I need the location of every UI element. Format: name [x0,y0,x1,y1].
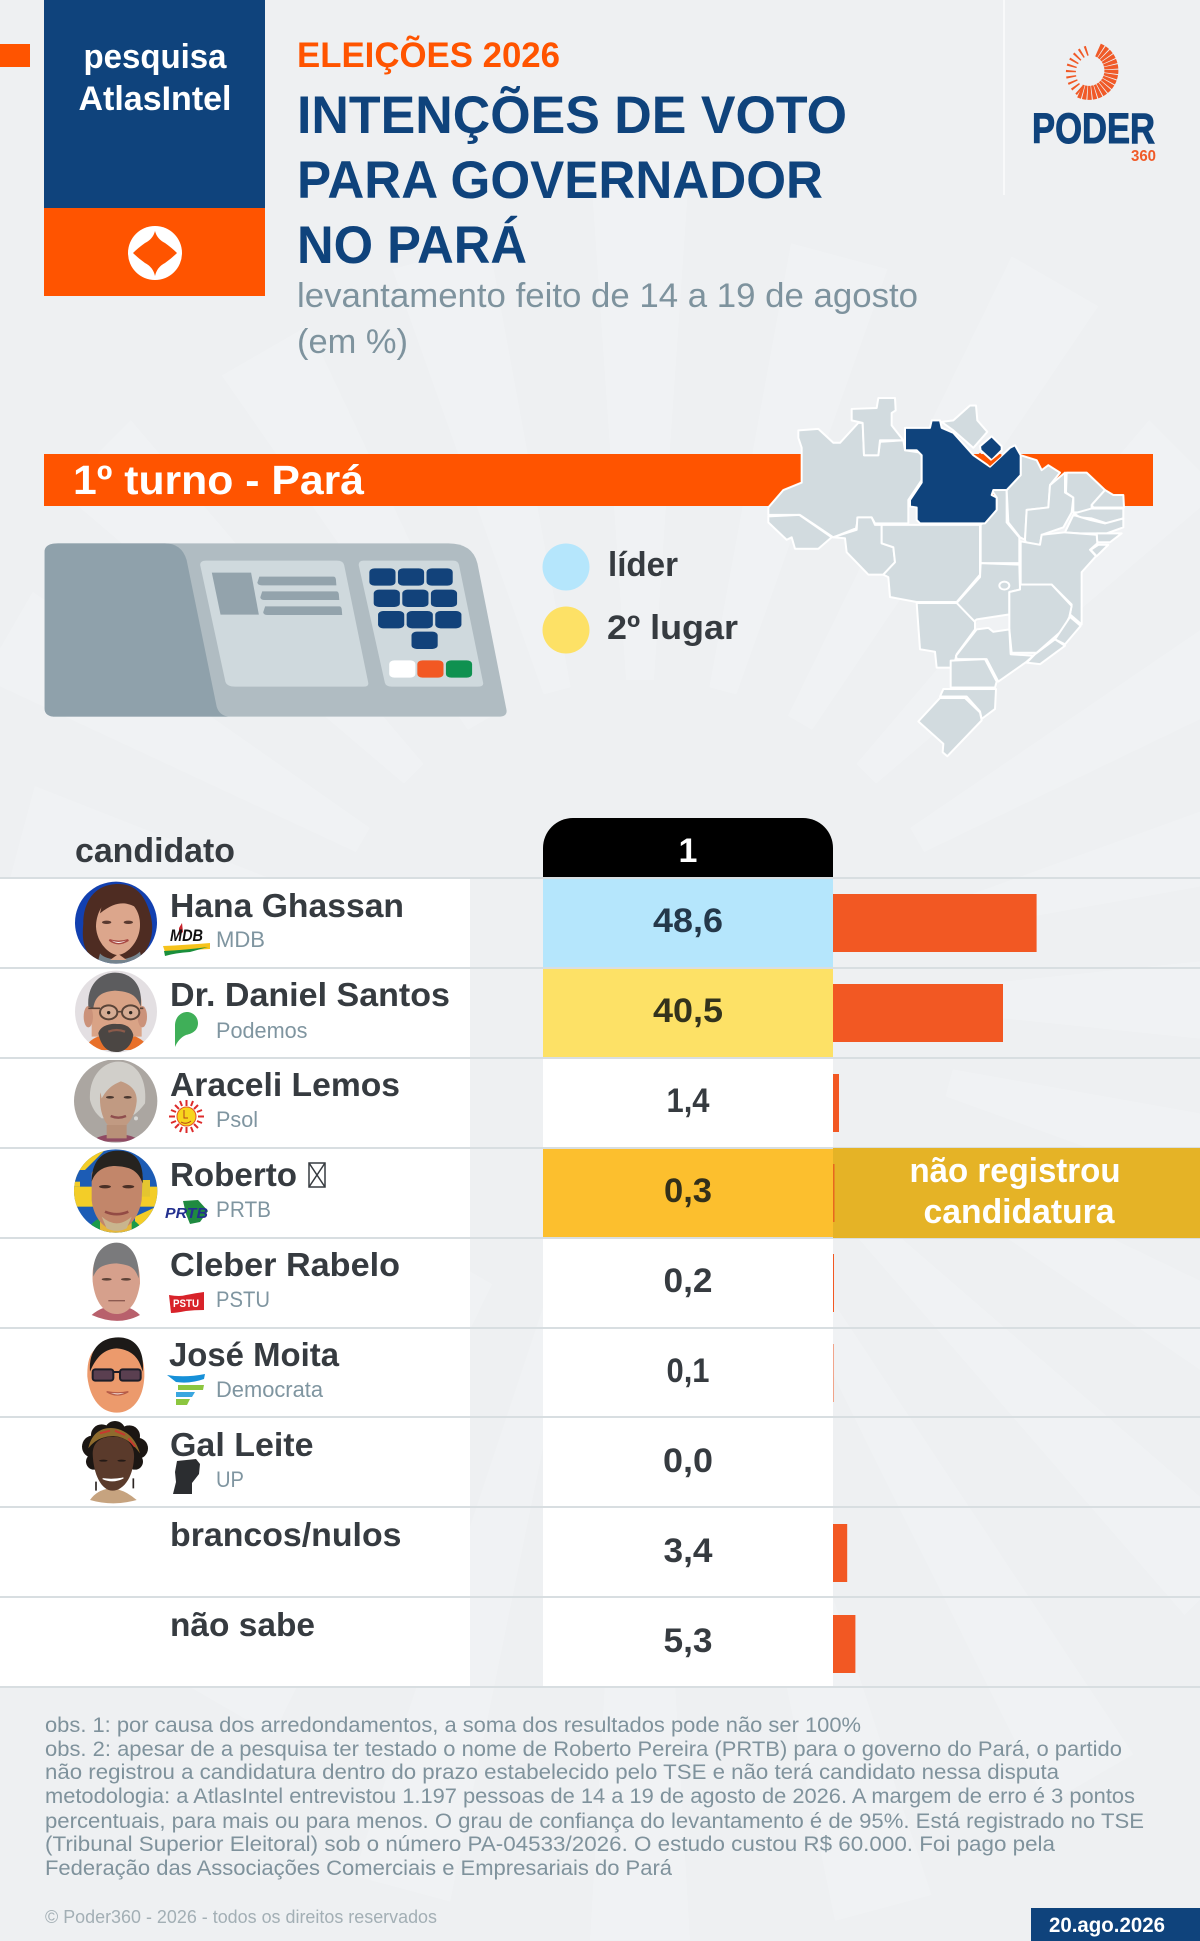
photo: Araceli Lemos [73,1060,160,1143]
row: Araceli Lemos: Psol [216,1107,258,1132]
title: PARA GOVERNADOR [297,151,823,210]
copyright: © Poder360 - 2026 - todos os direitos reservados [45,1907,437,1927]
values: 3,4 [664,1532,713,1570]
date badge: 20.ago.2026 [1049,1914,1165,1937]
row: Araceli Lemos [73,1060,400,1143]
row: Hana Ghassan [73,880,404,967]
banner: 1º turno: 1º turno - Pará [73,457,364,503]
values: 0,2 [664,1262,712,1300]
values: 48,6 [653,902,723,940]
values: 1,4 [666,1082,710,1120]
values: 0,1 [666,1352,710,1390]
notes: metodologia: a AtlasIntel entrevistou 1.197 pessoas de 14 a 19 de agosto de 2026. A margem de erro é 3 pontos [45,1785,1135,1808]
row: Dr. Daniel Santos: Dr. Daniel Santos [170,976,450,1013]
icon: Podemos logo [175,1012,198,1047]
subtitle [297,277,918,361]
badge label [78,38,232,118]
icon: sun [1071,50,1111,93]
callout: não registrou candidatura [833,1148,1200,1238]
logo: Poder360: PODER [1032,105,1155,153]
row: Hana Ghassan: MDB [216,927,265,952]
column heading: 1 [543,818,833,878]
photo: Dr. Daniel Santos [73,970,160,1053]
subtitle: (em %) [297,323,408,361]
map: Brazil with Pará highlighted [768,398,1124,756]
legend [542,544,738,654]
callout: não registrou candidatura: candidatura [924,1193,1116,1231]
row: Gal Leite: UP [216,1467,244,1492]
date badge [1031,1908,1200,1941]
values: 0,3 [664,1172,712,1210]
row: não sabe: não sabe [170,1606,315,1643]
values: 40,5 [653,992,723,1030]
marker: orange tab [0,44,30,67]
row: Dr. Daniel Santos: Podemos [216,1018,308,1043]
icon: PSTU flag [169,1292,204,1313]
notes: percentuais, para mais ou para menos. O grau de confiança do levantamento é de 95%. Está registrado no TSE [45,1810,1144,1833]
values: 5,3 [664,1622,712,1660]
row: Gal Leite: Gal Leite [170,1426,314,1463]
icon: missing glyph box [309,1163,325,1187]
row: Gal Leite [82,1421,313,1503]
notes [45,1714,1144,1880]
row: brancos/nulos: brancos/nulos [170,1516,402,1553]
notes: obs. 1: por causa dos arredondamentos, a soma dos resultados pode não ser 100% [45,1714,861,1737]
photo: Gal Leite [82,1421,148,1503]
notes: obs. 2: apesar de a pesquisa ter testado o nome de Roberto Pereira (PRTB) para o governo do Pará, o partido [45,1738,1122,1761]
icon: MDB logo: MDB [170,926,203,945]
photo: Hana Ghassan [73,880,160,967]
title: NO PARÁ [297,215,527,275]
panel: pesquisa AtlasIntel badge [44,0,265,296]
notes: (Tribunal Superior Eleitoral) sob o número PA-04533/2026. O estudo custou R$ 60.000. Foi pago pela [45,1833,1055,1856]
icon: Democrata logo [167,1374,205,1405]
legend: 2º lugar [542,606,738,654]
callout: não registrou candidatura: não registrou [910,1152,1120,1190]
row: Cleber Rabelo: Cleber Rabelo [170,1246,400,1283]
bar chart: percentages [833,894,1037,1673]
banner: 1º turno [44,454,1153,506]
icon: UP raised fist [173,1459,200,1494]
icon: PRTB logo: PRTB [165,1205,208,1222]
title [297,85,847,275]
logo: Poder360 [1032,50,1156,165]
badge label: AtlasIntel [78,80,232,118]
row: Roberto [73,1148,325,1235]
row: Cleber Rabelo [92,1243,400,1321]
values: 0,0 [663,1442,713,1480]
values [653,902,723,1660]
subtitle: levantamento feito de 14 a 19 de agosto [297,277,918,315]
badge label: pesquisa [84,38,228,76]
legend: 2º lugar: 2º lugar [607,609,738,647]
photo: José Moita [87,1337,144,1413]
row: José Moita: José Moita [169,1336,340,1373]
row: Dr. Daniel Santos [73,970,450,1053]
column heading: 1: 1 [679,832,697,870]
column heading: candidato: candidato [75,832,235,870]
photo: Roberto [73,1148,160,1235]
icon: PSTU flag: PSTU [173,1298,199,1310]
title: INTENÇÕES DE VOTO [297,85,847,145]
row: Roberto: PRTB [216,1197,271,1222]
icon: MDB logo [163,923,210,956]
notes: não registrou a candidatura dentro do prazo estabelecido pelo TSE e não terá candidato nessa disputa [45,1761,1059,1784]
panel: results table [0,877,1200,1688]
row: Roberto: Roberto [170,1156,297,1193]
legend: líder: líder [608,546,678,584]
logo: Poder360: 360 [1131,148,1156,165]
icon: PRTB logo [165,1200,208,1224]
heading: eleições 2026: ELEIÇÕES 2026 [297,35,560,75]
photo: Cleber Rabelo [92,1243,140,1321]
icon: Psol sun [169,1100,204,1133]
icon: AtlasIntel compass [128,226,182,280]
row: Araceli Lemos: Araceli Lemos [170,1066,400,1103]
row: José Moita: Democrata [216,1377,324,1402]
row: Hana Ghassan: Hana Ghassan [170,887,404,924]
state: Pará highlighted [905,420,1021,523]
notes: Federação das Associações Comerciais e Empresariais do Pará [45,1857,672,1880]
legend: líder [542,544,678,590]
icon: voting machine [45,543,507,717]
row: José Moita [87,1336,340,1413]
row: Cleber Rabelo: PSTU [216,1287,270,1312]
